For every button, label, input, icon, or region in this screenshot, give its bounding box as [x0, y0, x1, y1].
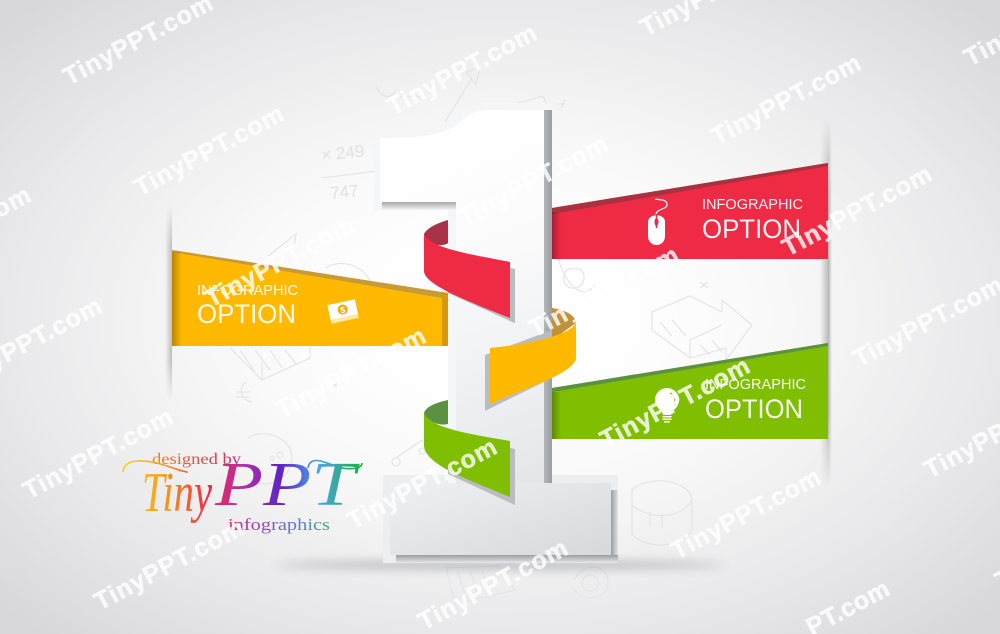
text: green option: OPTION	[705, 394, 803, 424]
base back layer	[383, 475, 618, 563]
text: red option: OPTION	[702, 214, 801, 244]
ribbon: red	[424, 220, 510, 318]
watermarks: TinyPPT.com	[90, 514, 248, 616]
panel: green option	[552, 343, 828, 439]
icon: money	[327, 299, 359, 324]
text: yellow option: OPTION	[197, 299, 296, 329]
icon: money: $	[339, 305, 346, 315]
floor shadow	[275, 561, 725, 569]
watermarks: TinyPPT.com	[454, 130, 612, 232]
icon: mouse	[648, 199, 667, 245]
ribbon: green	[424, 400, 510, 497]
text: red option: INFOGRAPHIC	[702, 196, 803, 213]
watermarks: TinyPPT.com	[343, 433, 501, 535]
slit shadows	[165, 118, 832, 488]
ribbon shadows	[448, 268, 552, 505]
logo: designed by TinyPPT infographics: designed by	[152, 451, 241, 468]
panel: red option	[552, 163, 828, 259]
watermarks: TinyPPT.com	[272, 322, 430, 424]
background doodles: 747	[329, 181, 359, 203]
logo: designed by TinyPPT infographics: infographics	[228, 515, 330, 534]
panel: yellow option	[172, 250, 448, 346]
watermarks: TinyPPT.com	[596, 352, 754, 454]
watermarks: TinyPPT.com	[201, 211, 359, 313]
watermarks: TinyPPT.com	[667, 463, 825, 565]
watermarks: TinyPPT.com	[525, 241, 683, 343]
background doodles: *	[332, 379, 338, 396]
background doodles: × 249	[320, 142, 365, 165]
digit back layer	[374, 103, 552, 483]
logo: designed by TinyPPT infographics	[123, 451, 362, 534]
logo: designed by TinyPPT infographics: PPT	[214, 451, 361, 519]
ribbon: yellow	[490, 308, 576, 404]
text: red option	[702, 196, 803, 244]
number one	[374, 103, 618, 563]
text: yellow option	[197, 282, 298, 329]
watermarks: TinyPPT.com	[19, 403, 177, 505]
watermarks: TinyPPT.com	[383, 19, 541, 121]
watermarks: TinyPPT.com	[414, 534, 572, 634]
logo: designed by TinyPPT infographics: Tiny	[142, 462, 212, 524]
text: yellow option: INFOGRAPHIC	[197, 282, 298, 299]
icon: light bulb	[655, 388, 679, 422]
watermarks: TinyPPT.com	[130, 100, 288, 202]
base front face	[390, 483, 611, 555]
watermarks: TinyPPT.com	[707, 49, 865, 151]
digit front face	[380, 110, 544, 484]
background doodles	[230, 68, 752, 604]
text: green option	[705, 376, 806, 424]
text: green option: INFOGRAPHIC	[705, 376, 806, 393]
watermarks: TinyPPT.com	[778, 160, 936, 262]
